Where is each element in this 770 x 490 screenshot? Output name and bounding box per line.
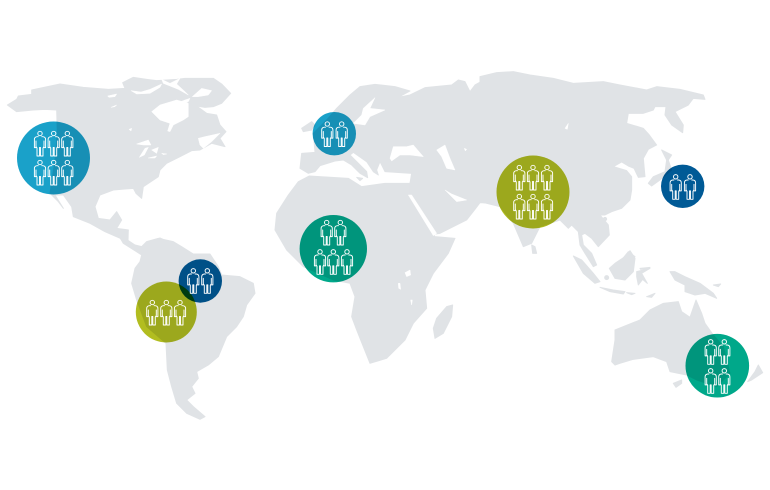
marker: Japan, two people: [661, 165, 704, 208]
landmass: North America: [7, 77, 231, 242]
world map: [7, 72, 763, 419]
marker: North America, six people: [17, 122, 90, 194]
marker: South America west, three people: [136, 282, 197, 342]
landmass: South America: [105, 230, 255, 419]
landmass: Southeast Asia and Oceania: [573, 251, 763, 387]
marker: India, six people: [496, 156, 570, 228]
marker: Europe, two people: [313, 112, 356, 155]
marker: Australia, four people: [686, 334, 749, 398]
marker: South America north, two people: [179, 259, 222, 303]
landmass: eastern Asia: [480, 72, 705, 267]
landmass: Europe, Africa, western Asia: [275, 75, 493, 363]
marker: Africa, five people: [300, 215, 367, 282]
